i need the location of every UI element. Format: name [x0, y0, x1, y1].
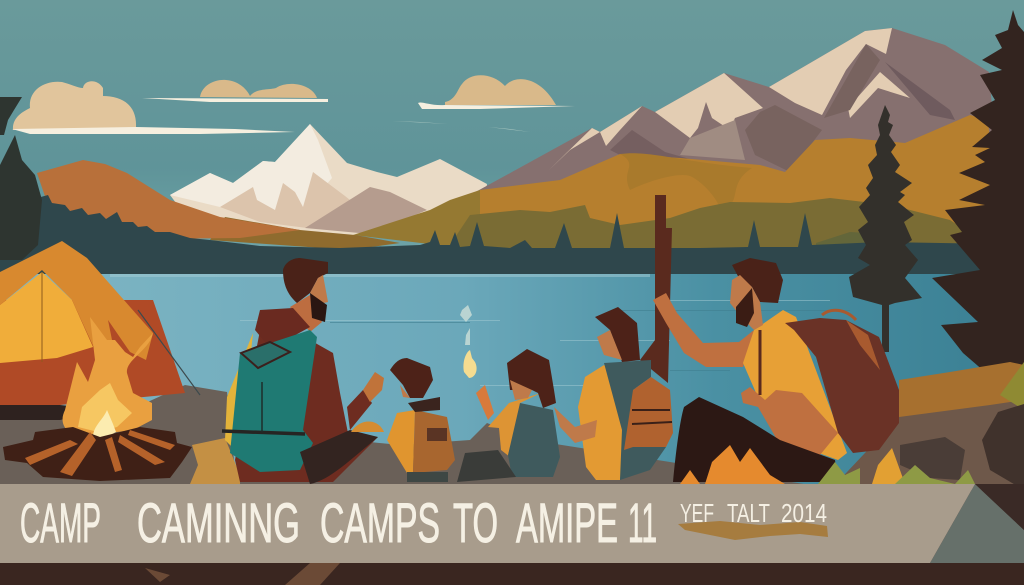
- tent: [0, 241, 200, 420]
- campfire: [3, 317, 192, 481]
- small date: TALT: [727, 498, 770, 528]
- title banner: [0, 484, 975, 563]
- man holding staff with brown backpack: [653, 258, 899, 482]
- ground: [0, 385, 840, 490]
- small date: YEF: [680, 498, 714, 528]
- golden hills: [470, 115, 1000, 245]
- bottom ground: [0, 563, 1024, 585]
- ground stones: [145, 563, 340, 585]
- main title: TO: [453, 491, 498, 554]
- olive hills: [210, 190, 980, 260]
- right shore: [830, 362, 1024, 490]
- marshmallow flame and smoke: [460, 305, 494, 420]
- main title: [20, 491, 657, 554]
- teen with backpack: [554, 307, 673, 480]
- main title: CAMPS: [320, 491, 440, 554]
- dark forest line: [0, 195, 1000, 274]
- title banner: 11: [628, 491, 657, 554]
- foreground leaves: [680, 437, 975, 484]
- far right tree: [932, 10, 1024, 372]
- left tree: [0, 97, 42, 260]
- main title: AMIPE: [516, 491, 618, 554]
- right corner banner fold: [930, 484, 1024, 563]
- right mountains: [470, 28, 1000, 240]
- brush underline: [678, 521, 828, 540]
- logs: [3, 427, 192, 481]
- middle tree: [849, 105, 922, 352]
- girl with grey backpack: [457, 349, 560, 482]
- flames: [63, 317, 153, 437]
- small date: [680, 498, 827, 528]
- right dark corner: [975, 484, 1024, 530]
- walking staff: [640, 195, 672, 383]
- rock seat: [190, 438, 240, 484]
- main title: CAMP: [20, 491, 101, 554]
- small date: 2014: [781, 498, 827, 528]
- lake: [0, 274, 1024, 484]
- child with orange backpack: [387, 358, 455, 482]
- sky: [0, 0, 1024, 280]
- main title: CAMINNG: [137, 491, 300, 554]
- orange hill: [37, 160, 300, 240]
- snowy mountain: [170, 124, 487, 235]
- clouds: [12, 75, 575, 134]
- man with teal backpack: [222, 258, 384, 484]
